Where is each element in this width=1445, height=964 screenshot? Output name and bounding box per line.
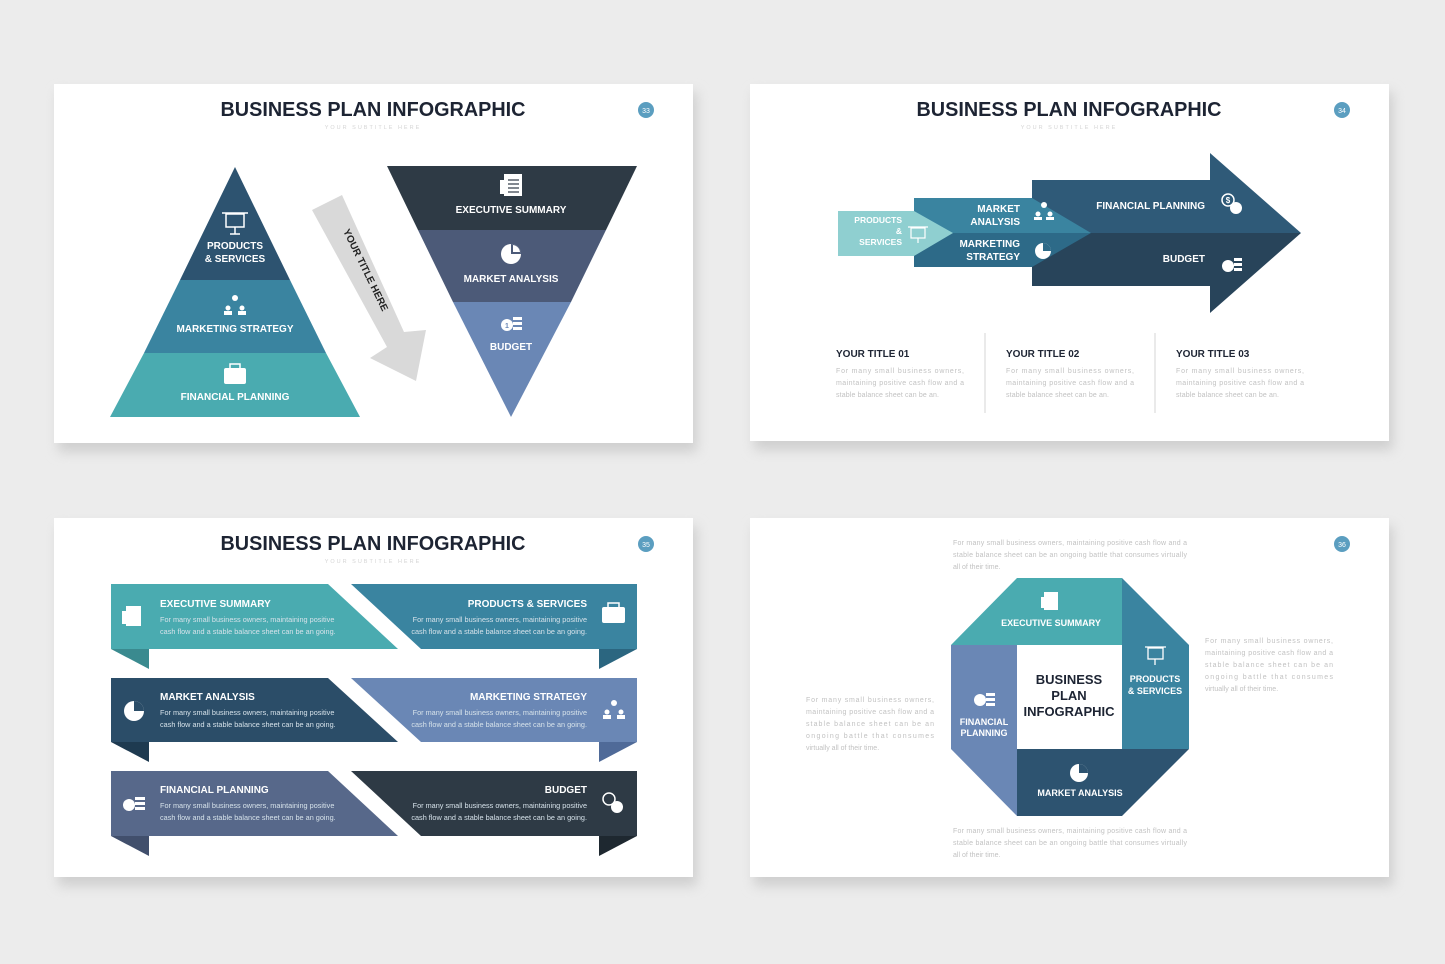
pyramid [110, 167, 360, 417]
ribbon: marketing strategy: cash flow and a stable balance sheet can be an going. [411, 720, 587, 729]
inverted pyramid: BUDGET [490, 342, 532, 353]
icon: coins [501, 317, 522, 331]
text: left: maintaining positive cash flow and a [806, 709, 934, 716]
text: right: stable balance sheet can be an [1205, 662, 1333, 669]
middle arrow: MARKET [977, 204, 1020, 215]
octagon [951, 578, 1189, 816]
column 1: YOUR TITLE 01 [836, 349, 910, 360]
ribbon: financial planning [111, 771, 398, 856]
text: bottom: stable balance sheet can be an ongoing battle that consumes virtually [953, 840, 1188, 847]
segment: executive summary [951, 578, 1122, 645]
title: BUSINESS PLAN INFOGRAPHIC [916, 99, 1222, 121]
ribbon: executive summary: cash flow and a stable balance sheet can be an going. [160, 627, 336, 636]
column 3: YOUR TITLE 03 [1176, 349, 1250, 360]
column 2 [1006, 349, 1134, 399]
big arrow [1032, 153, 1301, 313]
text columns [836, 333, 1304, 413]
column 2: For many small business owners, [1006, 368, 1134, 375]
page number: 33 [642, 108, 650, 115]
column 3: maintaining positive cash flow and a [1176, 380, 1304, 387]
page number [1334, 102, 1350, 118]
ribbon: financial planning: FINANCIAL PLANNING [160, 785, 269, 796]
segment: financial planning: FINANCIAL [960, 717, 1009, 727]
segment: executive summary: EXECUTIVE SUMMARY [1001, 618, 1101, 628]
middle arrow: ANALYSIS [970, 217, 1020, 228]
column 1 [836, 349, 964, 399]
page number [638, 536, 654, 552]
middle arrow [914, 198, 1091, 267]
text: top: For many small business owners, maintaining positive cash flow and a [953, 540, 1187, 547]
pyramid: PRODUCTS [207, 241, 263, 252]
products chevron: & [896, 226, 902, 236]
column 2: YOUR TITLE 02 [1006, 349, 1080, 360]
panel: pyramid slide [54, 84, 697, 452]
ribbon: budget [351, 771, 637, 856]
ribbon: financial planning: For many small business owners, maintaining positive [160, 801, 334, 810]
text: top: all of their time. [953, 564, 1001, 571]
page number [638, 102, 654, 118]
arrow: your title here: YOUR TITLE HERE [340, 227, 390, 314]
ribbon: marketing strategy [351, 678, 637, 762]
center title [1017, 645, 1122, 749]
ribbon: market analysis: cash flow and a stable balance sheet can be an going. [160, 720, 336, 729]
middle arrow: MARKETING [959, 239, 1020, 250]
text: left: For many small business owners, [806, 697, 934, 704]
text: top [953, 540, 1188, 571]
ribbon: budget: cash flow and a stable balance sheet can be an going. [411, 813, 587, 822]
ribbon: market analysis [111, 678, 398, 762]
segment: products & services: PRODUCTS [1130, 674, 1180, 684]
center title: INFOGRAPHIC [1024, 704, 1115, 719]
subtitle: YOUR SUBTITLE HERE [325, 559, 421, 565]
page number [1334, 536, 1350, 552]
ribbon: products & services: cash flow and a stable balance sheet can be an going. [411, 627, 587, 636]
pyramid: & SERVICES [205, 254, 266, 265]
panel: ribbons slide [54, 518, 697, 886]
center title: PLAN [1051, 688, 1087, 703]
icon: coins: 1 [505, 323, 509, 330]
column 2: stable balance sheet can be an. [1006, 392, 1109, 399]
icon: briefcase [224, 364, 246, 384]
ribbon: products & services [351, 584, 637, 669]
text: bottom [953, 828, 1188, 859]
products chevron: SERVICES [859, 237, 902, 247]
icon: team [224, 295, 246, 315]
ribbon: marketing strategy: MARKETING STRATEGY [470, 692, 587, 703]
text: right [1205, 638, 1334, 693]
subtitle: YOUR SUBTITLE HERE [1021, 125, 1117, 131]
column 3 [1176, 349, 1304, 399]
icon: presentation [908, 227, 928, 243]
segment: products & services: & SERVICES [1128, 686, 1182, 696]
panel: arrow slide [750, 84, 1393, 450]
ribbon: budget: For many small business owners, maintaining positive [413, 801, 587, 810]
subtitle: YOUR SUBTITLE HERE [325, 125, 421, 131]
title: BUSINESS PLAN INFOGRAPHIC [220, 533, 526, 555]
inverted pyramid [387, 166, 637, 417]
icon: document [500, 174, 522, 196]
column 1: maintaining positive cash flow and a [836, 380, 964, 387]
icon: dollar [1222, 194, 1242, 214]
column 3: stable balance sheet can be an. [1176, 392, 1279, 399]
text: right: For many small business owners, [1205, 638, 1333, 645]
center title: BUSINESS [1036, 672, 1103, 687]
middle arrow: STRATEGY [966, 252, 1020, 263]
segment: financial planning: PLANNING [960, 728, 1008, 738]
ribbon: market analysis: For many small business owners, maintaining positive [160, 708, 334, 717]
page number: 35 [642, 542, 650, 549]
segment: market analysis [1017, 749, 1189, 816]
ribbon: products & services: PRODUCTS & SERVICES [468, 599, 587, 610]
ribbon: executive summary [111, 584, 398, 669]
text: right: virtually all of their time. [1205, 686, 1278, 693]
text: left [806, 697, 934, 752]
products chevron [838, 211, 953, 256]
page number: 34 [1338, 108, 1346, 115]
text: left: ongoing battle that consumes [806, 733, 934, 740]
title: BUSINESS PLAN INFOGRAPHIC [220, 99, 526, 121]
panel: octagon slide [750, 518, 1393, 886]
text: top: stable balance sheet can be an ongoing battle that consumes virtually [953, 552, 1188, 559]
icon: team [1034, 202, 1054, 220]
icon: dollar: $ [1226, 196, 1231, 205]
segment: products & services [1122, 578, 1189, 749]
segment: market analysis: MARKET ANALYSIS [1037, 788, 1123, 798]
ribbon: market analysis: MARKET ANALYSIS [160, 692, 255, 703]
inverted pyramid: MARKET ANALYSIS [464, 274, 559, 285]
column 1: For many small business owners, [836, 368, 964, 375]
big arrow: FINANCIAL PLANNING [1096, 201, 1205, 212]
icon: coins [1222, 258, 1242, 272]
products chevron: PRODUCTS [854, 215, 902, 225]
segment: financial planning [951, 645, 1017, 816]
page number: 36 [1338, 542, 1346, 549]
icon: presentation [222, 213, 248, 234]
column 1: stable balance sheet can be an. [836, 392, 939, 399]
big arrow: BUDGET [1163, 254, 1205, 265]
text: left: virtually all of their time. [806, 745, 879, 752]
icon: pie [1035, 243, 1051, 259]
ribbon: budget: BUDGET [545, 785, 587, 796]
inverted pyramid: EXECUTIVE SUMMARY [456, 205, 567, 216]
text: bottom: For many small business owners, maintaining positive cash flow and a [953, 828, 1187, 835]
pyramid: MARKETING STRATEGY [176, 324, 294, 335]
ribbon: products & services: For many small business owners, maintaining positive [413, 615, 587, 624]
pyramid: FINANCIAL PLANNING [181, 392, 290, 403]
ribbon: financial planning: cash flow and a stable balance sheet can be an going. [160, 813, 336, 822]
column 3: For many small business owners, [1176, 368, 1304, 375]
text: right: ongoing battle that consumes [1205, 674, 1334, 681]
icon: pie [501, 244, 521, 264]
text: bottom: all of their time. [953, 852, 1001, 859]
arrow: your title here [312, 195, 426, 381]
text: right: maintaining positive cash flow and a [1205, 650, 1333, 657]
text: left: stable balance sheet can be an [806, 721, 934, 728]
ribbon: marketing strategy: For many small business owners, maintaining positive [413, 708, 587, 717]
ribbon: executive summary: For many small business owners, maintaining positive [160, 615, 334, 624]
ribbon: executive summary: EXECUTIVE SUMMARY [160, 599, 271, 610]
column 2: maintaining positive cash flow and a [1006, 380, 1134, 387]
